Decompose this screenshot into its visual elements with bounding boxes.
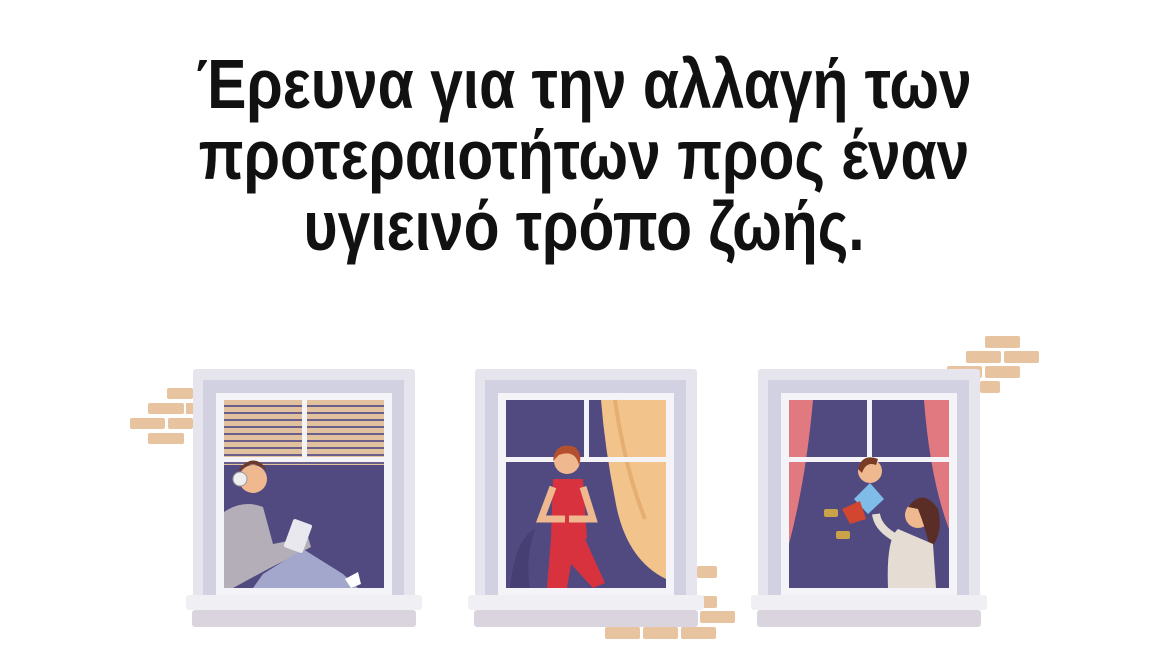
man (224, 504, 311, 588)
child (858, 459, 882, 483)
bricks: right top (947, 336, 1039, 393)
title: προτεραιοτήτων προς έναν (199, 116, 969, 194)
title: υγιεινό τρόπο ζωής. (303, 187, 865, 265)
title: Έρευνα για την αλλαγή των (196, 45, 972, 123)
woman (554, 448, 580, 474)
bricks: bottom middle (586, 566, 735, 639)
window 1: man with tablet and blinds (193, 369, 415, 597)
window 3: mother lifting child (758, 369, 980, 597)
bricks: left (130, 388, 193, 444)
title (196, 45, 972, 265)
mother (905, 502, 931, 528)
window 2: woman doing yoga with curtain (475, 369, 697, 597)
